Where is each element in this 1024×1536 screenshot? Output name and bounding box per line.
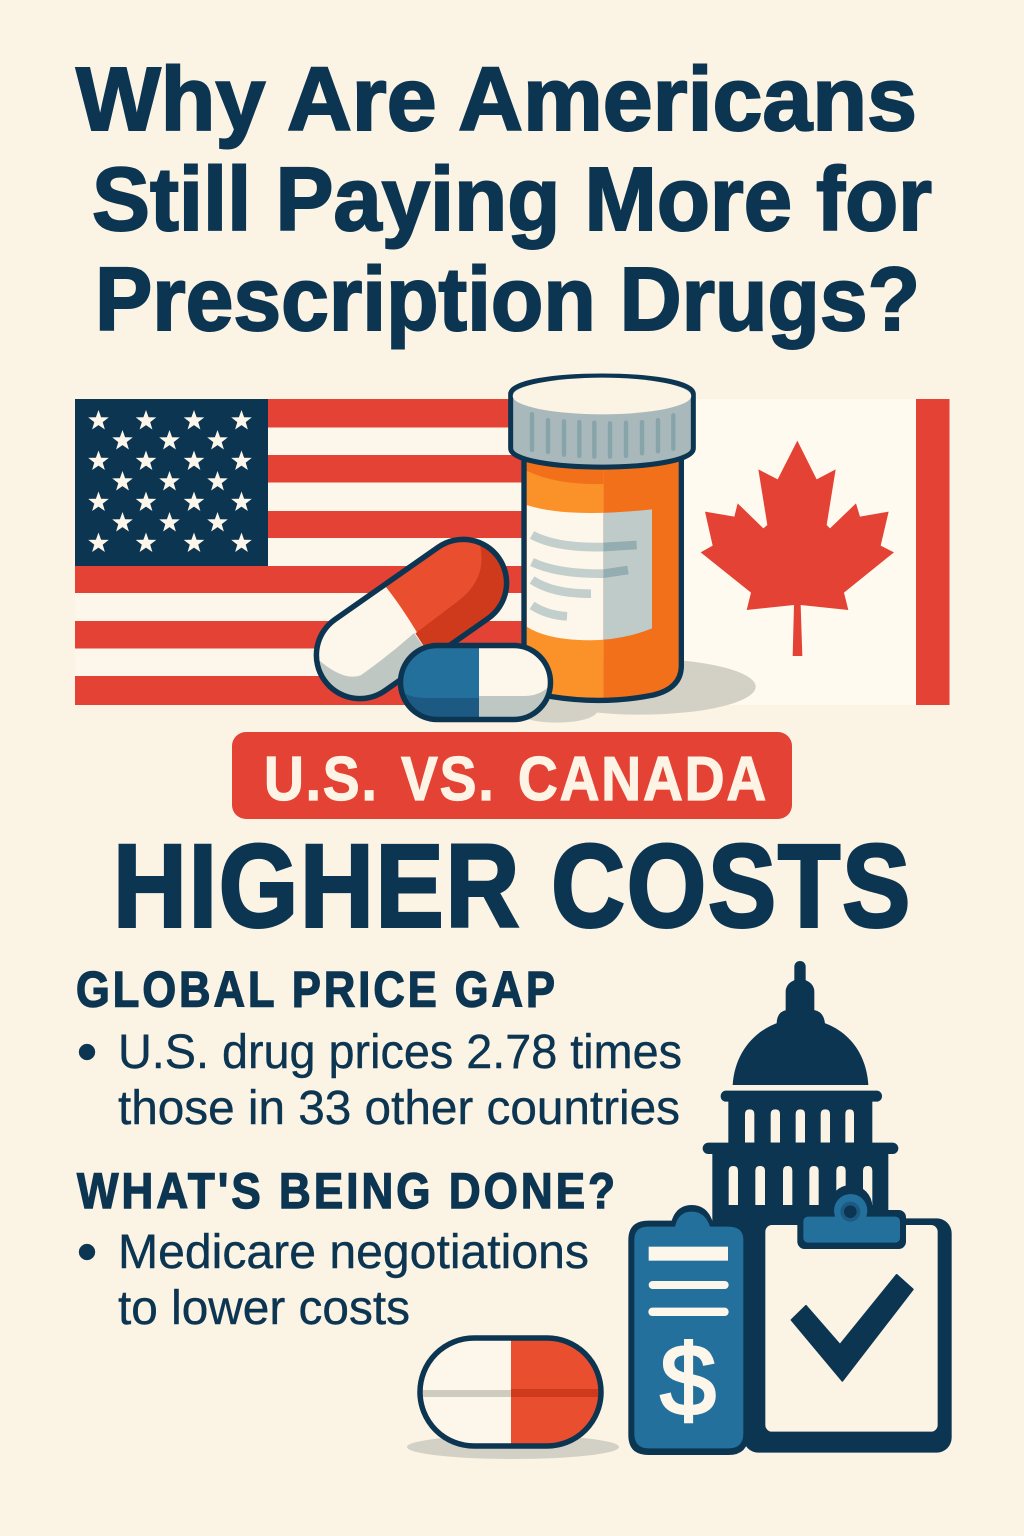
- icons: capitol, cost sheet and checklist: [628, 961, 952, 1455]
- bullet: Medicare negotiations: Medicare negotiations: [118, 1226, 589, 1279]
- section: global price gap: [76, 962, 682, 1135]
- bullet: price comparison: those in 33 other countries: [118, 1082, 680, 1135]
- clip: [797, 1185, 906, 1249]
- icon: capsule: [407, 1336, 619, 1459]
- flag: United States: [75, 399, 525, 705]
- maple leaf: [701, 441, 894, 656]
- dollar sign: $: [660, 1324, 716, 1436]
- title: Why Are Americans: [76, 50, 917, 150]
- bullet: Medicare negotiations: [79, 1226, 589, 1335]
- pill bottle: [511, 376, 756, 723]
- heading: higher costs: HIGHER COSTS: [113, 820, 912, 952]
- title: Still Paying More for: [92, 150, 932, 250]
- hero illustration: flags, pill bottle and capsules: [75, 376, 950, 723]
- icon: checklist clipboard: [743, 1185, 952, 1453]
- subheading: what's being done: WHAT'S BEING DONE?: [77, 1163, 618, 1219]
- icon: capitol building: [703, 961, 898, 1250]
- stars: [88, 410, 252, 552]
- title: Prescription Drugs?: [95, 250, 920, 350]
- capsule: red and white: [314, 536, 510, 702]
- bullet: price comparison: [79, 1026, 682, 1135]
- capsule: blue and white: [398, 643, 555, 723]
- icon: cost sheet: [628, 1205, 748, 1455]
- banner: U.S. vs. Canada: U.S. VS. CANADA: [264, 745, 768, 814]
- bottle cap: [511, 376, 693, 467]
- checkmark: [792, 1275, 913, 1381]
- title: [76, 50, 932, 350]
- bullet: Medicare negotiations: to lower costs: [118, 1282, 410, 1335]
- flag: Canada: [525, 399, 950, 705]
- prescription label: [523, 503, 653, 643]
- bullet: price comparison: U.S. drug prices 2.78 times: [118, 1026, 682, 1079]
- subheading: global price gap: GLOBAL PRICE GAP: [76, 962, 558, 1018]
- infographic canvas: [74, 64, 952, 1459]
- section: what's being done: [77, 1163, 618, 1335]
